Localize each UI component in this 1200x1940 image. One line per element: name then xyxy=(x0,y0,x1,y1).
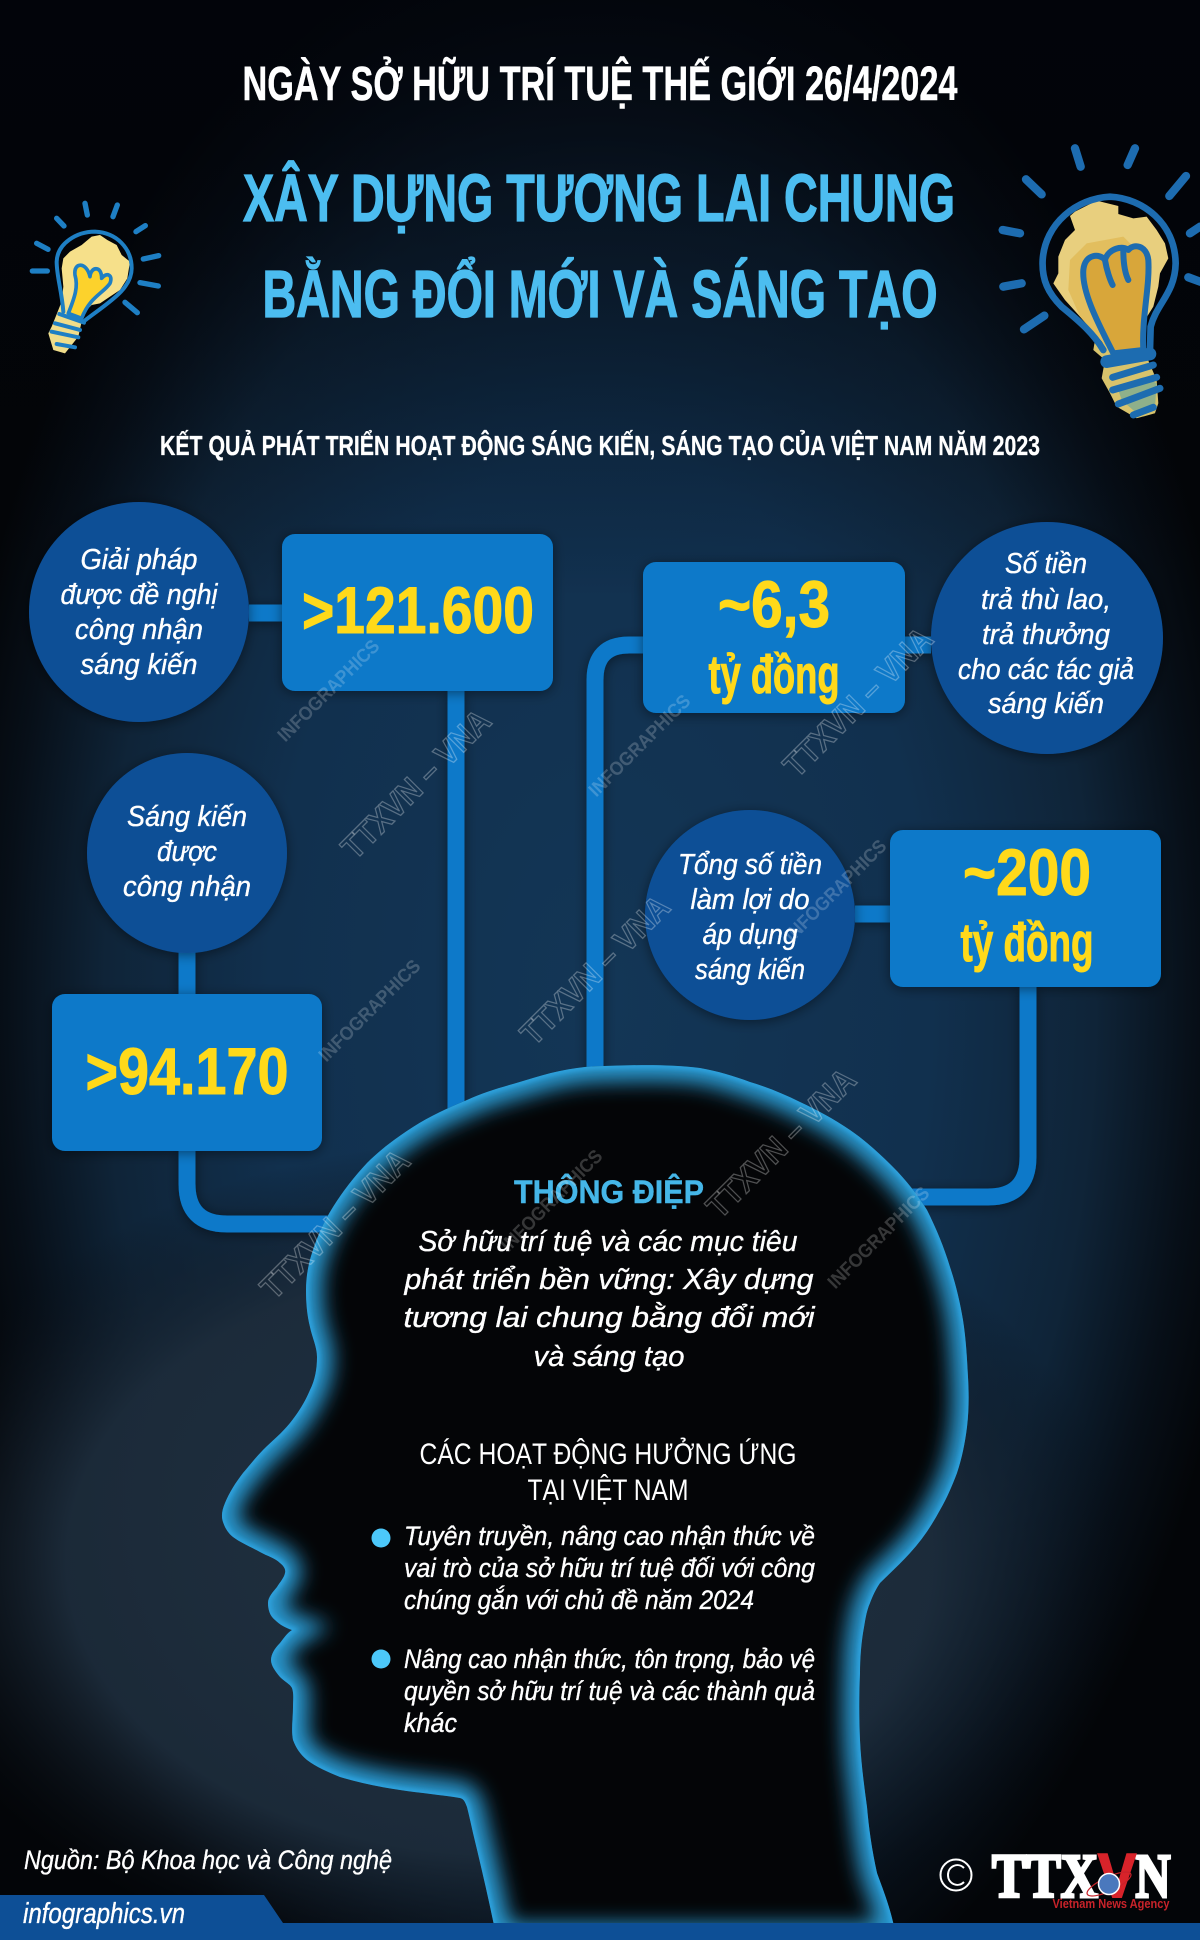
panel: 121.600 value xyxy=(282,534,553,691)
bullet text: quyền sở hữu trí tuệ và các thành quả xyxy=(404,1676,815,1706)
bullet dot xyxy=(372,1528,390,1548)
watermarks: TTXVN – VNA xyxy=(334,702,498,866)
footer band xyxy=(0,1895,1200,1940)
value: >94.170 xyxy=(86,1034,288,1108)
label: authors' remuneration: cho các tác giả xyxy=(958,654,1134,686)
label: solutions proposed: công nhận xyxy=(75,614,203,646)
label: initiatives recognised: công nhận xyxy=(123,871,251,903)
label: authors' remuneration: sáng kiến xyxy=(988,688,1104,720)
bullet text: Nâng cao nhận thức, tôn trọng, bảo vệ xyxy=(404,1644,815,1674)
watermarks: TTXVN – VNA xyxy=(253,1142,417,1306)
circle: initiatives recognised xyxy=(87,753,287,953)
bullet text: vai trò của sở hữu trí tuệ đối với công xyxy=(404,1553,815,1583)
bullet item two xyxy=(372,1644,815,1738)
panel: total benefit xyxy=(645,810,855,1020)
head silhouette xyxy=(222,1065,969,1940)
box xyxy=(52,994,322,1151)
message text xyxy=(403,1226,816,1373)
label: total benefit xyxy=(678,849,822,986)
circle: total benefit xyxy=(645,810,855,1020)
bullet text: chúng gắn với chủ đề năm 2024 xyxy=(404,1584,754,1615)
bullet item one xyxy=(372,1521,815,1615)
label: solutions proposed: được đề nghị xyxy=(60,579,219,611)
panel: 200 billion value xyxy=(890,830,1161,987)
source: Nguồn: Bộ Khoa học và Công nghệ xyxy=(24,1845,392,1875)
watermarks xyxy=(253,620,940,1306)
unit: tỷ đồng xyxy=(708,645,840,705)
label: authors' remuneration: trả thưởng xyxy=(982,619,1110,651)
watermarks: TTXVN – VNA xyxy=(776,620,940,784)
heading: activities in Vietnam: TẠI VIỆT NAM xyxy=(528,1474,688,1507)
bullet text xyxy=(404,1644,815,1738)
label: authors' remuneration: Số tiền xyxy=(1005,548,1087,580)
bullet text: khác xyxy=(404,1708,457,1738)
label: total benefit: sáng kiến xyxy=(695,954,805,986)
website: infographics.vn xyxy=(23,1898,185,1930)
value: >121.600 xyxy=(302,573,534,647)
heading: activities in Vietnam: CÁC HOẠT ĐỘNG HƯỞNG ỨNG xyxy=(420,1437,796,1471)
circle: solutions proposed xyxy=(29,502,249,722)
label: total benefit: áp dụng xyxy=(702,919,798,951)
panel: solutions proposed xyxy=(29,502,249,722)
logo: TTXVN: V xyxy=(1098,1842,1136,1911)
main heading xyxy=(243,161,955,332)
label: initiatives recognised xyxy=(123,801,251,903)
panel: authors' remuneration xyxy=(931,522,1163,754)
icon: small light bulb xyxy=(32,203,159,353)
label: authors' remuneration: trả thù lao, xyxy=(981,584,1111,616)
label: total benefit: làm lợi do xyxy=(690,884,810,916)
bullet text: Tuyên truyền, nâng cao nhận thức về xyxy=(404,1521,815,1551)
label: authors' remuneration xyxy=(958,548,1134,720)
panel: 6,3 billion value xyxy=(643,562,905,713)
watermarks: INFOGRAPHICS xyxy=(274,636,384,746)
message text: và sáng tạo xyxy=(534,1341,684,1373)
circle: authors' remuneration xyxy=(931,522,1163,754)
label: initiatives recognised: được xyxy=(157,836,217,868)
message text: tương lai chung bằng đổi mới xyxy=(404,1301,816,1334)
heading: message: THÔNG ĐIỆP xyxy=(514,1174,704,1210)
message text: Sở hữu trí tuệ và các mục tiêu xyxy=(418,1226,798,1258)
copyright symbol xyxy=(940,1860,972,1890)
label: initiatives recognised: Sáng kiến xyxy=(127,801,247,833)
bullet dot xyxy=(372,1650,390,1668)
heading: activities in Vietnam xyxy=(420,1437,796,1507)
label: solutions proposed: sáng kiến xyxy=(80,649,198,681)
watermarks: TTXVN – VNA xyxy=(699,1061,863,1225)
bullet text xyxy=(404,1521,815,1615)
watermarks: TTXVN – VNA xyxy=(513,888,677,1052)
box xyxy=(643,562,905,713)
message text: phát triển bền vững: Xây dựng xyxy=(403,1264,814,1296)
watermarks: INFOGRAPHICS xyxy=(315,956,425,1066)
label: solutions proposed: Giải pháp xyxy=(80,544,198,576)
watermarks: INFOGRAPHICS xyxy=(497,1146,607,1256)
watermarks: INFOGRAPHICS xyxy=(585,691,695,801)
label: total benefit: Tổng số tiền xyxy=(678,849,822,881)
value: ~6,3 xyxy=(718,567,830,641)
box xyxy=(282,534,553,691)
unit: tỷ đồng xyxy=(960,913,1094,973)
label: solutions proposed xyxy=(60,544,219,681)
icon: large light bulb xyxy=(1003,148,1200,418)
panel: initiatives recognised xyxy=(87,753,287,953)
box xyxy=(890,830,1161,987)
logo: TTXVN: N xyxy=(1136,1843,1170,1911)
watermarks: INFOGRAPHICS xyxy=(781,836,891,946)
panel: 94.170 value xyxy=(52,994,322,1151)
connector lines xyxy=(187,613,1028,1224)
logo: TTXVN: Vietnam News Agency xyxy=(1052,1896,1170,1911)
watermarks: INFOGRAPHICS xyxy=(824,1183,934,1293)
logo: TTXVN: TTX xyxy=(992,1843,1098,1911)
value: ~200 xyxy=(963,835,1091,909)
